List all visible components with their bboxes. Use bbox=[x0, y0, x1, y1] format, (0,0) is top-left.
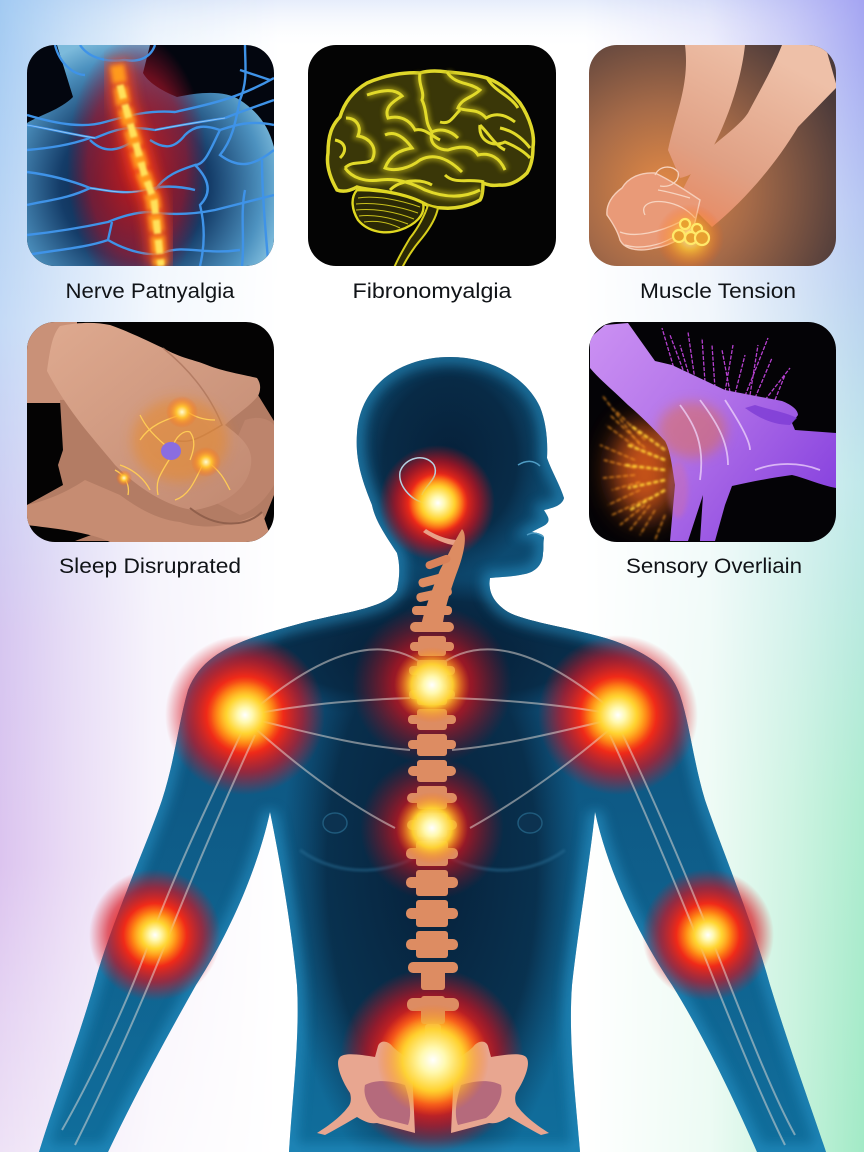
panel: brain image bbox=[308, 45, 556, 268]
back silhouette bbox=[27, 45, 274, 266]
central body figure bbox=[39, 345, 826, 1152]
yellow brain bbox=[327, 71, 533, 268]
right hip bone bbox=[451, 1042, 549, 1135]
left wrist bbox=[27, 322, 77, 403]
body silhouette bbox=[39, 357, 826, 1152]
spine bbox=[406, 529, 465, 1046]
orange sparks bbox=[613, 422, 677, 518]
purple sparks bbox=[662, 328, 790, 400]
nerve network bbox=[27, 45, 274, 266]
brain fold glow bbox=[345, 72, 505, 196]
red spine aura bbox=[69, 45, 205, 266]
panel: sensory image bbox=[589, 322, 836, 542]
nerve lines bbox=[62, 649, 795, 1145]
purple hand bbox=[590, 323, 836, 541]
lower hand bbox=[27, 480, 270, 542]
limb pain halos bbox=[89, 445, 774, 1152]
under hand mass bbox=[27, 395, 274, 541]
pelvis bbox=[317, 1042, 549, 1135]
right fingers behind bbox=[218, 418, 274, 514]
glowing knot bbox=[658, 206, 721, 266]
ear bbox=[400, 458, 435, 503]
body shading bbox=[39, 345, 826, 1152]
main hand bbox=[47, 323, 260, 510]
label: Sensory Overliain: Sensory Overliain bbox=[626, 555, 802, 578]
hand veining bbox=[658, 402, 726, 458]
label: Muscle Tension: Muscle Tension bbox=[640, 280, 796, 303]
brain folds bbox=[335, 72, 530, 196]
label: Fibronomyalgia: Fibronomyalgia bbox=[352, 280, 512, 303]
forearms bbox=[668, 45, 745, 178]
label: Sleep Disruprated: Sleep Disruprated bbox=[59, 555, 241, 578]
glowing spine bbox=[117, 60, 161, 266]
cerebellum bbox=[353, 190, 423, 232]
brain stem bbox=[394, 205, 438, 268]
panel: sleep image bbox=[27, 322, 274, 542]
nerve sparks bbox=[115, 396, 230, 500]
label: Nerve Patnyalgia: Nerve Patnyalgia bbox=[66, 280, 235, 303]
fist bbox=[607, 173, 700, 250]
glowing pain cores bbox=[130, 473, 733, 1116]
pain halos bbox=[352, 605, 512, 900]
panel: muscle tension image bbox=[589, 45, 837, 272]
panel: nerve pain image bbox=[27, 45, 274, 266]
left hip bone bbox=[317, 1042, 415, 1135]
